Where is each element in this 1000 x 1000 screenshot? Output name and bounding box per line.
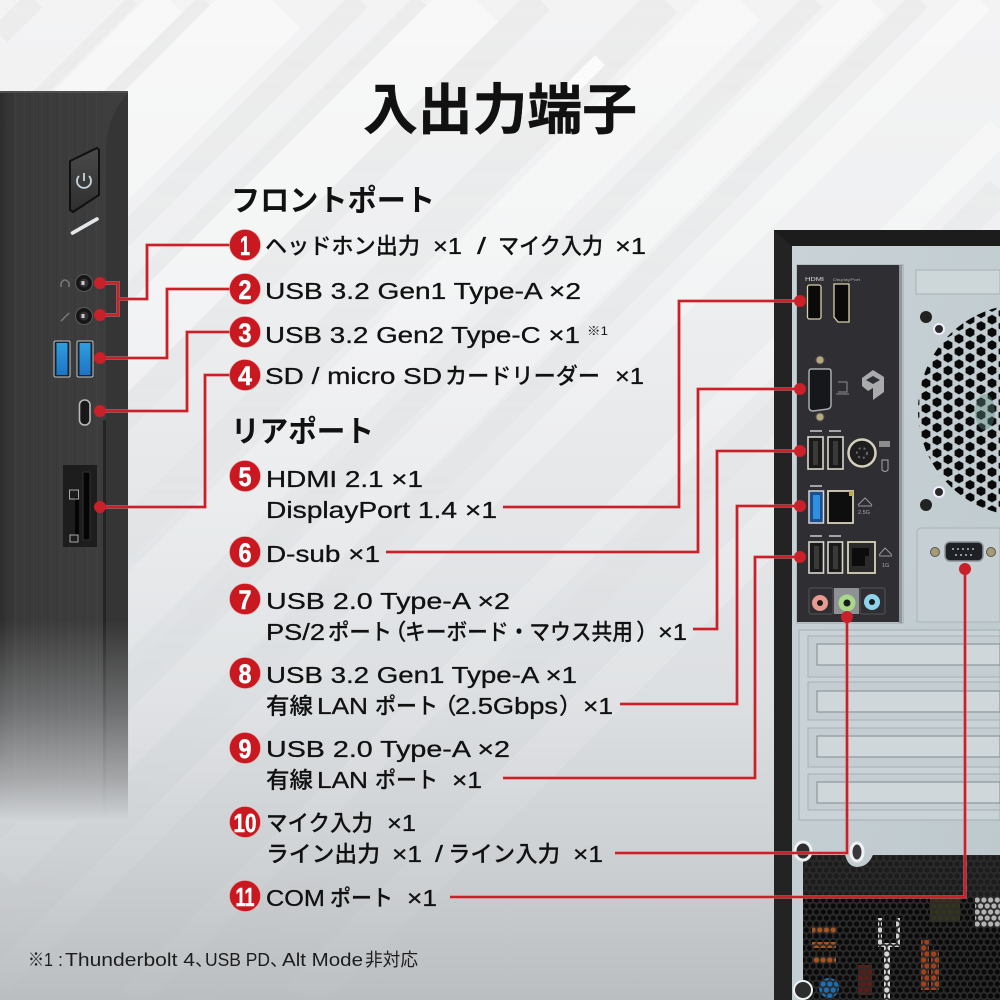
item 5: DisplayPort 1.4 ×1 [266, 497, 497, 523]
footnote: Alt Mode [282, 950, 363, 970]
audio jacks [809, 588, 885, 614]
item 9: 9 [238, 734, 252, 764]
power indicator [72, 219, 97, 233]
item 1: ×1 [433, 233, 462, 259]
item 4: 4 [238, 361, 252, 391]
icon: power button [70, 148, 99, 212]
item 11: 11 [236, 882, 254, 912]
item 1: 1 [240, 231, 250, 261]
leader line 7: USB 2.0 / PS2 [693, 445, 806, 629]
USB 2.0 ports lower [809, 536, 842, 573]
item 10: マイク入力 [266, 806, 373, 838]
item 11: ポート [330, 881, 393, 913]
footnote: USB PD [205, 950, 270, 970]
title: 入出力端子 [363, 65, 637, 145]
item 8 [230, 658, 613, 721]
item 10: 10 [234, 808, 256, 838]
item 6: 6 [238, 538, 252, 568]
rear of PC tower [774, 230, 1000, 1000]
item 6: D-sub ×1 [266, 541, 380, 567]
fan grille [918, 308, 1000, 514]
item 2: 2 [238, 275, 252, 305]
item 8: ×1 [583, 693, 613, 719]
item 8: LAN [317, 693, 368, 719]
leader line 6: D-sub [386, 383, 806, 552]
item 7: 7 [238, 585, 252, 615]
item 8: （ [434, 689, 457, 721]
item 11 [230, 880, 437, 913]
LAN port 1G: 1G [882, 563, 889, 569]
item 10: / [435, 841, 444, 867]
heading: front ports: フロントポート [231, 176, 435, 220]
leader line 8: USB 3.2 / LAN [620, 500, 806, 704]
item 5: HDMI 2.1 ×1 [266, 466, 423, 492]
item 11: ×1 [407, 885, 437, 911]
item 9: ポート [375, 763, 438, 795]
leader line 5: HDMI / DisplayPort [503, 295, 806, 507]
leader line 1: headphone / mic [94, 245, 230, 321]
item 7: ） [636, 615, 659, 647]
footnote: 、 [195, 950, 213, 970]
D-sub port [809, 356, 831, 421]
item 7 [230, 584, 687, 647]
item 1: / [477, 233, 487, 259]
item 1 [230, 229, 646, 261]
leader line 9: USB 2.0 / LAN [503, 551, 806, 778]
COM port [930, 542, 996, 561]
item 6 [230, 536, 380, 568]
footnote: 非対応 [365, 950, 418, 970]
HDMI port [805, 277, 824, 319]
front USB Type-A ports [54, 341, 93, 377]
item 10 [230, 806, 603, 869]
item 2: USB 3.2 Gen1 Type-A ×2 [265, 278, 581, 304]
expansion slots [799, 630, 1000, 820]
power supply grille [794, 842, 1000, 1000]
item 7: ポート [328, 615, 392, 647]
item 3: USB 3.2 Gen2 Type-C ×1 [265, 322, 580, 348]
LAN port 2.5G [828, 491, 872, 523]
footnote: 、 [270, 950, 288, 970]
leader line 11: COM [450, 563, 971, 897]
item 7: キーボード・マウス共用 [405, 615, 633, 647]
item 1: ヘッドホン出力 [265, 229, 420, 261]
item 10: ライン入力 [448, 837, 560, 869]
DisplayPort port: DisplayPort [833, 277, 861, 282]
footnote [28, 950, 418, 970]
item 3 [230, 316, 608, 348]
item 8: USB 3.2 Gen1 Type-A ×1 [266, 662, 577, 688]
SD card reader [63, 465, 97, 547]
leader line 3: front Type-C [94, 332, 230, 417]
item 9 [230, 732, 510, 795]
USB Type-C port [80, 400, 90, 425]
logo [836, 370, 884, 400]
item 8: 有線 [266, 689, 314, 721]
front panel of PC tower [0, 91, 129, 822]
item 8: ポート [375, 689, 438, 721]
item 5 [230, 460, 497, 523]
DisplayPort port [833, 277, 861, 322]
item 4: カードリーダー [445, 359, 600, 391]
item 9: LAN [317, 767, 368, 793]
I/O shield [797, 265, 903, 623]
footnote: ※1 [28, 950, 53, 970]
leader line 10: audio [615, 611, 853, 853]
item 4: SD / micro SD [265, 363, 442, 389]
item 2 [230, 274, 581, 305]
LAN port 2.5G: 2.5G [858, 510, 870, 516]
item 8: 8 [238, 659, 252, 689]
footnote: Thunderbolt 4 [65, 950, 195, 970]
item 9: USB 2.0 Type-A ×2 [266, 736, 510, 762]
item 9: ×1 [452, 767, 482, 793]
item 5: 5 [238, 462, 252, 492]
item 7: ×1 [658, 619, 687, 645]
item 1: ×1 [615, 233, 646, 259]
item 8: ） [559, 689, 582, 721]
item 10: ×1 [387, 810, 416, 836]
item 9: 有線 [266, 763, 314, 795]
leader line 4: SD reader [94, 375, 230, 513]
item 10: ×1 [573, 841, 603, 867]
LAN port 1G [848, 542, 892, 573]
item 7: PS/2 [266, 619, 325, 645]
item 11: COM [266, 885, 325, 911]
USB 2.0 ports [808, 431, 843, 469]
lower-right recess [917, 528, 1000, 622]
item 7: （ [384, 615, 407, 647]
footnote: : [58, 950, 63, 970]
item 4 [230, 359, 644, 391]
HDMI port: HDMI [805, 277, 824, 283]
item 10: ×1 [392, 841, 422, 867]
item 8: 2.5Gbps [455, 693, 558, 719]
item 4: ×1 [615, 363, 644, 389]
heading: rear ports: リアポート [231, 407, 374, 451]
USB 3.2 port [809, 486, 824, 523]
item 1: マイク入力 [498, 229, 603, 261]
audio jacks [61, 274, 92, 324]
leader line 2: front USB [94, 289, 230, 364]
item 7: USB 2.0 Type-A ×2 [266, 588, 510, 614]
PS/2 port [848, 440, 890, 472]
item 10: ライン出力 [266, 837, 380, 869]
item 3: ※1 [587, 324, 608, 338]
item 3: 3 [238, 318, 252, 348]
